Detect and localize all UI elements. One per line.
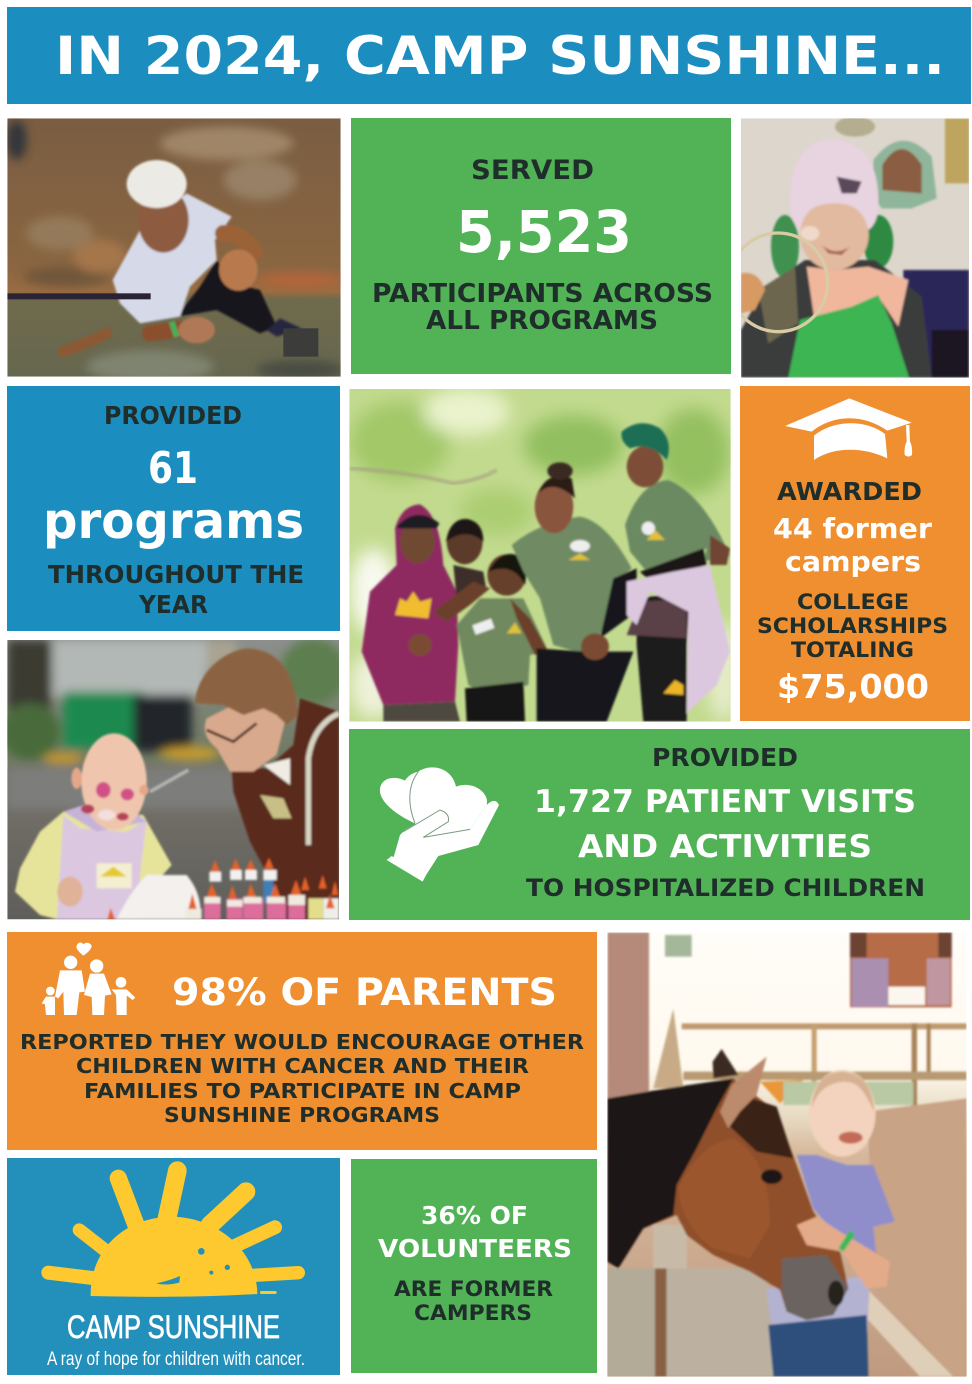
text: 1,727 patient visits and activities: 1,727 PATIENT VISITS [534,784,916,820]
logo wordmark: CAMP SUNSHINE [67,1309,280,1345]
text: to hospitalized children: TO HOSPITALIZED CHILDREN [526,874,925,902]
text: are former campers: ARE FORMER [394,1277,553,1301]
icon: graduation cap [785,398,912,460]
title banner [7,7,971,104]
panel: served [351,118,731,374]
text: 44 former campers [773,512,932,578]
title: IN 2024, CAMP SUNSHINE... [55,26,945,87]
icon: family with heart [42,942,135,1015]
text: 36% of volunteers: VOLUNTEERS [378,1234,572,1263]
text: 1,727 patient visits and activities: AND ACTIVITIES [578,829,872,865]
heading: provided: PROVIDED [652,743,798,772]
text: college scholarships totaling: TOTALING [791,638,914,662]
number: 61 programs [43,443,304,550]
logo tagline: A ray of hope for children with cancer. [47,1349,305,1370]
panel: 98% of parents [7,932,597,1150]
photo: child with face paint and helper [0,638,347,919]
text: college scholarships totaling: SCHOLARSHIPS [757,614,948,638]
photo: climber on rock wall [7,118,343,383]
heading: served: SERVED [471,155,594,186]
icon: hand holding hearts [380,767,499,882]
logo: sun mark [48,1171,298,1297]
panel: provided 61 programs [7,386,340,631]
number: 5,523: 5,523 [456,198,632,266]
text: are former campers: CAMPERS [414,1301,532,1325]
panel: 36% of volunteers [351,1159,597,1373]
text: college scholarships totaling: COLLEGE [797,590,909,614]
heading: 98% of parents: 98% OF PARENTS [172,971,557,1014]
photo: family group in green shirts [349,388,740,722]
text: parents report [20,1030,584,1127]
text: throughout the year [48,560,304,619]
photo: girl with horse [607,932,967,1377]
text: parents report: FAMILIES TO PARTICIPATE IN CAMP [84,1079,521,1103]
text: parents report: SUNSHINE PROGRAMS [164,1103,440,1127]
text: 36% of volunteers: 36% OF [421,1201,528,1230]
number: 61 programs: programs [43,492,304,550]
text: participants across all programs: ALL PROGRAMS [426,306,658,336]
text: participants across all programs: PARTICIPANTS ACROSS [372,279,713,309]
text: parents report: REPORTED THEY WOULD ENCOURAGE OTHER [20,1030,584,1054]
number: $75,000: $75,000 [777,667,929,706]
text: 36% of volunteers [378,1201,572,1263]
text: throughout the year: THROUGHOUT THE [48,560,304,589]
text: throughout the year: YEAR [138,590,208,619]
text: are former campers [394,1277,553,1325]
panel: camp sunshine logo [7,1158,340,1375]
heading: provided: PROVIDED [104,401,242,430]
text: college scholarships totaling [757,590,948,662]
text: 1,727 patient visits and activities [534,784,916,865]
text: 44 former campers: campers [785,545,921,578]
heading: awarded: AWARDED [777,477,922,506]
panel: patient visits [349,729,970,920]
photo: child with hoop [729,117,969,378]
text: parents report: CHILDREN WITH CANCER AND THEIR [76,1054,529,1078]
number: 61 programs: 61 [148,443,198,494]
panel: awarded scholarships [740,386,970,721]
text: participants across all programs [372,279,713,336]
text: 44 former campers: 44 former [773,512,932,545]
